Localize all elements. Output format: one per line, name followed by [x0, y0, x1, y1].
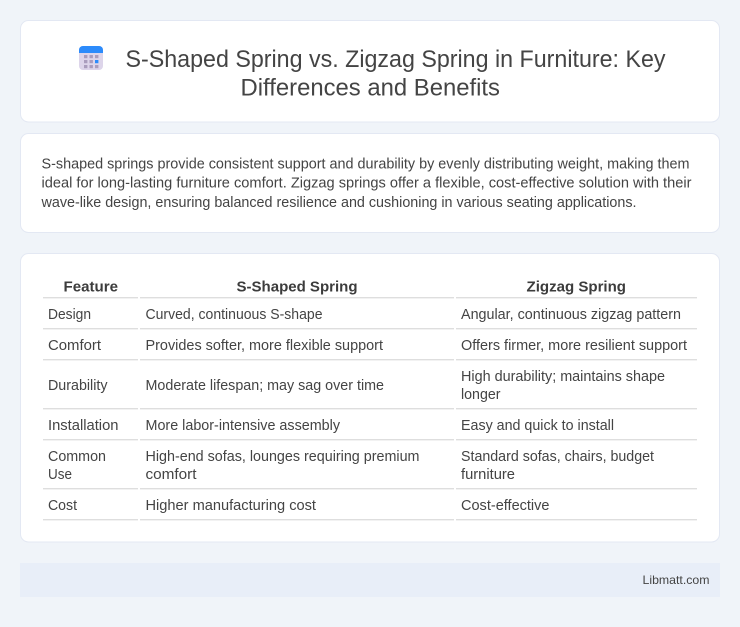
intro paragraph: ideal for long-lasting furniture comfort. Zigzag springs offer a flexible, cost-effective solution with their: [42, 176, 692, 192]
row: design: Design: [48, 307, 91, 323]
footer bar: Libmatt.com: [642, 573, 710, 587]
row: comfort: Provides softer, more flexible support: [146, 338, 383, 354]
row: common use: High-end sofas, lounges requiring premium: [146, 449, 420, 465]
row: design: Angular, continuous zigzag pattern: [461, 307, 681, 323]
row: durability: longer: [461, 387, 501, 403]
row: design: Curved, continuous S-shape: [146, 307, 322, 323]
intro paragraph: S-shaped springs provide consistent support and durability by evenly distributing weight, making them: [42, 156, 690, 172]
intro paragraph: [41, 156, 692, 211]
row: durability: Moderate lifespan; may sag over time: [146, 378, 384, 394]
row: comfort: Comfort: [48, 338, 101, 354]
row: durability: Durability: [48, 378, 108, 394]
table header row: Zigzag Spring: [526, 278, 626, 296]
row: design: [48, 307, 681, 323]
row: common use: [48, 449, 654, 483]
row: installation: Easy and quick to install: [461, 418, 614, 434]
row: installation: [48, 418, 614, 434]
panel: intro paragraph card: [20, 134, 720, 232]
row: cost: Cost: [48, 498, 77, 514]
table header row: Feature: [64, 278, 118, 296]
icon: calendar: [79, 46, 103, 70]
row: cost: [48, 498, 550, 514]
row: common use: Use: [48, 467, 72, 483]
table header row: [64, 278, 626, 296]
row: installation: Installation: [48, 418, 118, 434]
row: common use: Common: [48, 449, 106, 465]
row: common use: Standard sofas, chairs, budget: [461, 449, 654, 465]
footer bar: [20, 563, 720, 597]
row: cost: Higher manufacturing cost: [146, 498, 316, 514]
panel: comparison table card: [20, 254, 720, 542]
row: durability: High durability; maintains shape: [461, 369, 665, 385]
row: comfort: Offers firmer, more resilient support: [461, 338, 687, 354]
panel: title card: [20, 20, 720, 122]
intro paragraph: wave-like design, ensuring balanced resilience and cushioning in various seating applications.: [41, 195, 636, 211]
title: Differences and Benefits: [240, 74, 500, 102]
row: common use: furniture: [461, 467, 515, 483]
row: comfort: [48, 338, 687, 354]
row: common use: comfort: [146, 467, 196, 483]
title: [126, 46, 666, 102]
title: S-Shaped Spring vs. Zigzag Spring in Furniture: Key: [126, 46, 666, 73]
row: durability: [48, 369, 665, 403]
table header row: S-Shaped Spring: [236, 278, 358, 296]
row: cost: Cost-effective: [461, 498, 550, 514]
row: installation: More labor-intensive assembly: [146, 418, 341, 434]
